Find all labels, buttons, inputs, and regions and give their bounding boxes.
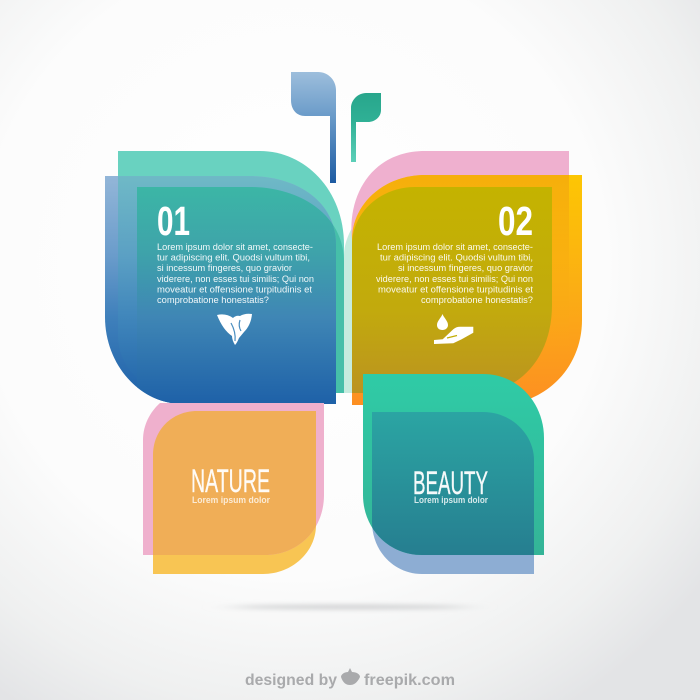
text block 02: Lorem ipsum dolor sit amet, consecte- xyxy=(377,242,533,252)
panel: wing 01 xyxy=(105,151,344,404)
green shape xyxy=(363,374,544,555)
icon: hand with water drop xyxy=(434,314,473,344)
antenna: green leaf xyxy=(351,93,381,162)
text block 02: moveatur et offensione turpitudinis et xyxy=(378,284,534,294)
pink shape xyxy=(143,403,324,555)
icon: freepik logo xyxy=(341,668,360,685)
blue over inner xyxy=(137,187,336,403)
text block 02: comprobatione honestatis? xyxy=(421,295,533,305)
mint inner edge xyxy=(344,228,352,393)
text block 02: viderere, non esses tui similis; Qui non xyxy=(376,274,533,284)
text block 01 xyxy=(157,242,314,305)
orange shape xyxy=(352,175,582,405)
teal inner shape xyxy=(137,187,344,393)
orange and pink overlap xyxy=(352,175,569,238)
label: NATURE: NATURE xyxy=(191,463,270,499)
yellow shape xyxy=(153,411,316,574)
blue shape xyxy=(105,176,336,404)
text block 01: Lorem ipsum dolor sit amet, consecte- xyxy=(157,242,313,252)
panel: wing 02 xyxy=(344,151,582,405)
blue over teal xyxy=(118,176,332,282)
pink back shape xyxy=(351,151,569,360)
antenna: blue leaf xyxy=(291,72,336,183)
text block 01: si incessum fingeres, quo gravior xyxy=(157,263,292,273)
ground shadow xyxy=(230,604,470,610)
teal back shape xyxy=(118,151,344,393)
text block 01: comprobatione honestatis? xyxy=(157,295,269,305)
footer credit xyxy=(245,668,455,689)
overlap shape xyxy=(153,411,316,555)
pale blue shape xyxy=(372,412,534,574)
teal overlap xyxy=(372,412,534,555)
icon: leaves xyxy=(217,314,252,345)
text block 01: tur adipiscing elit. Quodsi vultum tibi, xyxy=(157,253,310,263)
panel: nature wing xyxy=(143,403,324,574)
text block 02: tur adipiscing elit. Quodsi vultum tibi, xyxy=(380,253,533,263)
credit text right: freepik.com xyxy=(364,672,455,689)
text block 02: si incessum fingeres, quo gravior xyxy=(398,263,533,273)
credit text left: designed by xyxy=(245,672,337,689)
panel: beauty wing xyxy=(363,374,544,574)
text block 01: moveatur et offensione turpitudinis et xyxy=(157,284,313,294)
number 01: 01 xyxy=(157,198,190,244)
text block 02 xyxy=(376,242,534,305)
sublabel: nature: Lorem ipsum dolor xyxy=(192,495,270,505)
number 02: 02 xyxy=(498,198,533,244)
sublabel: beauty: Lorem ipsum dolor xyxy=(414,495,488,505)
label: BEAUTY: BEAUTY xyxy=(413,465,488,501)
icon: butterfly antennae xyxy=(291,72,381,183)
olive inner shape xyxy=(352,187,552,393)
text block 01: viderere, non esses tui similis; Qui non xyxy=(157,274,314,284)
